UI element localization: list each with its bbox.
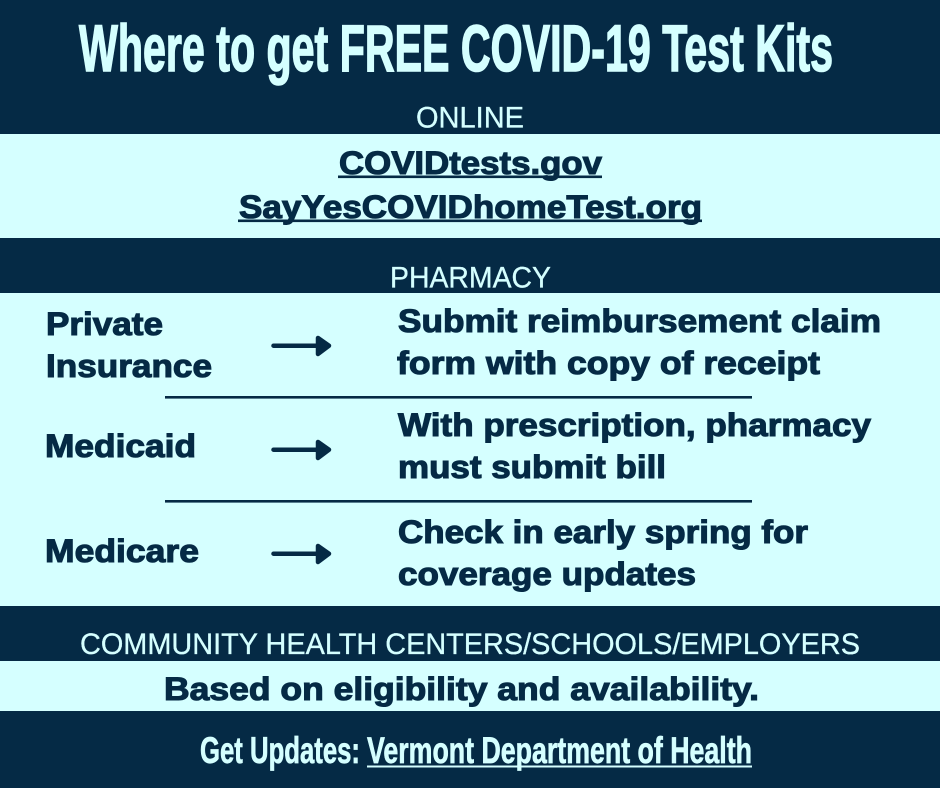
text: medicaid action: must submit bill <box>398 449 666 485</box>
panel: community <box>0 661 940 711</box>
heading: online: ONLINE <box>416 102 524 134</box>
text: private insurance action: form with copy of receipt <box>397 345 820 381</box>
text: medicare action: Check in early spring for <box>398 514 808 550</box>
label: medicare: Medicare <box>45 533 199 569</box>
heading: community health centers: COMMUNITY HEALTH CENTERS/SCHOOLS/EMPLOYERS <box>80 628 860 661</box>
heading: pharmacy: PHARMACY <box>390 262 551 294</box>
footer: updates <box>200 730 752 771</box>
panel: pharmacy <box>0 293 940 606</box>
text: medicare action <box>398 514 808 592</box>
label: private insurance <box>46 306 212 384</box>
text: private insurance action <box>397 303 881 381</box>
link: SayYesCOVIDhomeTest.org: SayYesCOVIDhomeTest.org <box>239 189 702 225</box>
label: private insurance: Insurance <box>46 348 212 384</box>
text: private insurance action: Submit reimbursement claim <box>398 303 881 339</box>
text: medicaid action: With prescription, pharmacy <box>398 407 871 443</box>
text: eligibility: Based on eligibility and availability. <box>164 671 759 707</box>
label: medicaid: Medicaid <box>45 428 196 464</box>
panel: online <box>0 134 940 238</box>
link: COVIDtests.gov: COVIDtests.gov <box>339 145 602 181</box>
text: medicare action: coverage updates <box>398 556 696 592</box>
text: medicaid action <box>398 407 871 485</box>
arrow: private insurance <box>274 338 329 354</box>
arrow: medicare <box>274 546 329 562</box>
footer: updates: Get Updates: <box>200 730 360 771</box>
link: Vermont Department of Health: Vermont Department of Health <box>367 730 752 771</box>
arrow: medicaid <box>274 442 329 458</box>
label: private insurance: Private <box>46 306 163 342</box>
